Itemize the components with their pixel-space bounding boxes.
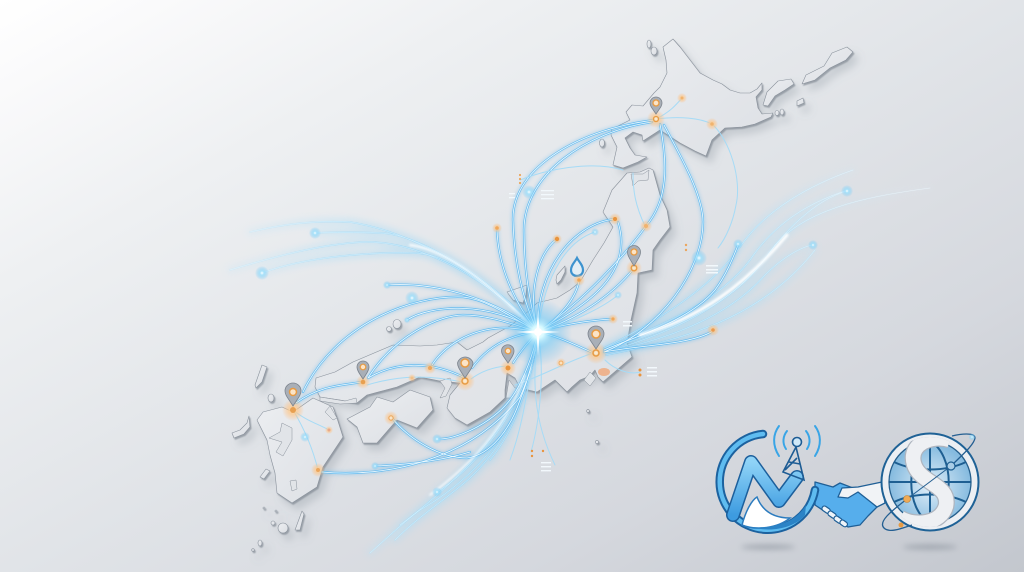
Sado island xyxy=(556,266,565,284)
blue sparkle nodes xyxy=(255,185,853,497)
pin: Hiroshima xyxy=(357,361,369,379)
network arcs xyxy=(230,98,930,553)
pin: Sendai xyxy=(628,246,640,266)
blue water drop icon xyxy=(571,258,583,276)
Shikoku xyxy=(347,390,433,443)
silver S letter xyxy=(900,438,950,523)
node glows xyxy=(282,93,719,477)
western islands xyxy=(255,365,267,388)
pin: Sapporo xyxy=(650,97,662,114)
Honshu xyxy=(315,168,670,425)
pin: Nagoya xyxy=(502,345,514,363)
pin: Fukuoka xyxy=(285,383,301,406)
small data readouts xyxy=(509,174,718,471)
Kyushu xyxy=(257,398,343,503)
map of Japan xyxy=(232,39,853,551)
pin: Tokyo xyxy=(588,326,604,349)
logo: M with antenna xyxy=(720,426,820,530)
antenna tower xyxy=(783,438,804,480)
bright fan cores xyxy=(410,235,787,495)
pin: Osaka xyxy=(458,357,473,378)
central hub glow xyxy=(504,298,572,366)
logo: S with globe xyxy=(882,434,978,530)
handshake icon xyxy=(815,482,885,528)
logo shadows xyxy=(741,544,957,550)
Hokkaido xyxy=(611,39,773,168)
logo group: handshake partnership xyxy=(720,426,978,550)
location pins xyxy=(285,97,662,406)
Sakhalin and Kuril islands xyxy=(802,47,853,84)
Noto peninsula xyxy=(507,285,527,303)
signal waves xyxy=(774,426,820,456)
bays and inland sea xyxy=(269,170,649,491)
orange coast highlight xyxy=(598,368,610,376)
